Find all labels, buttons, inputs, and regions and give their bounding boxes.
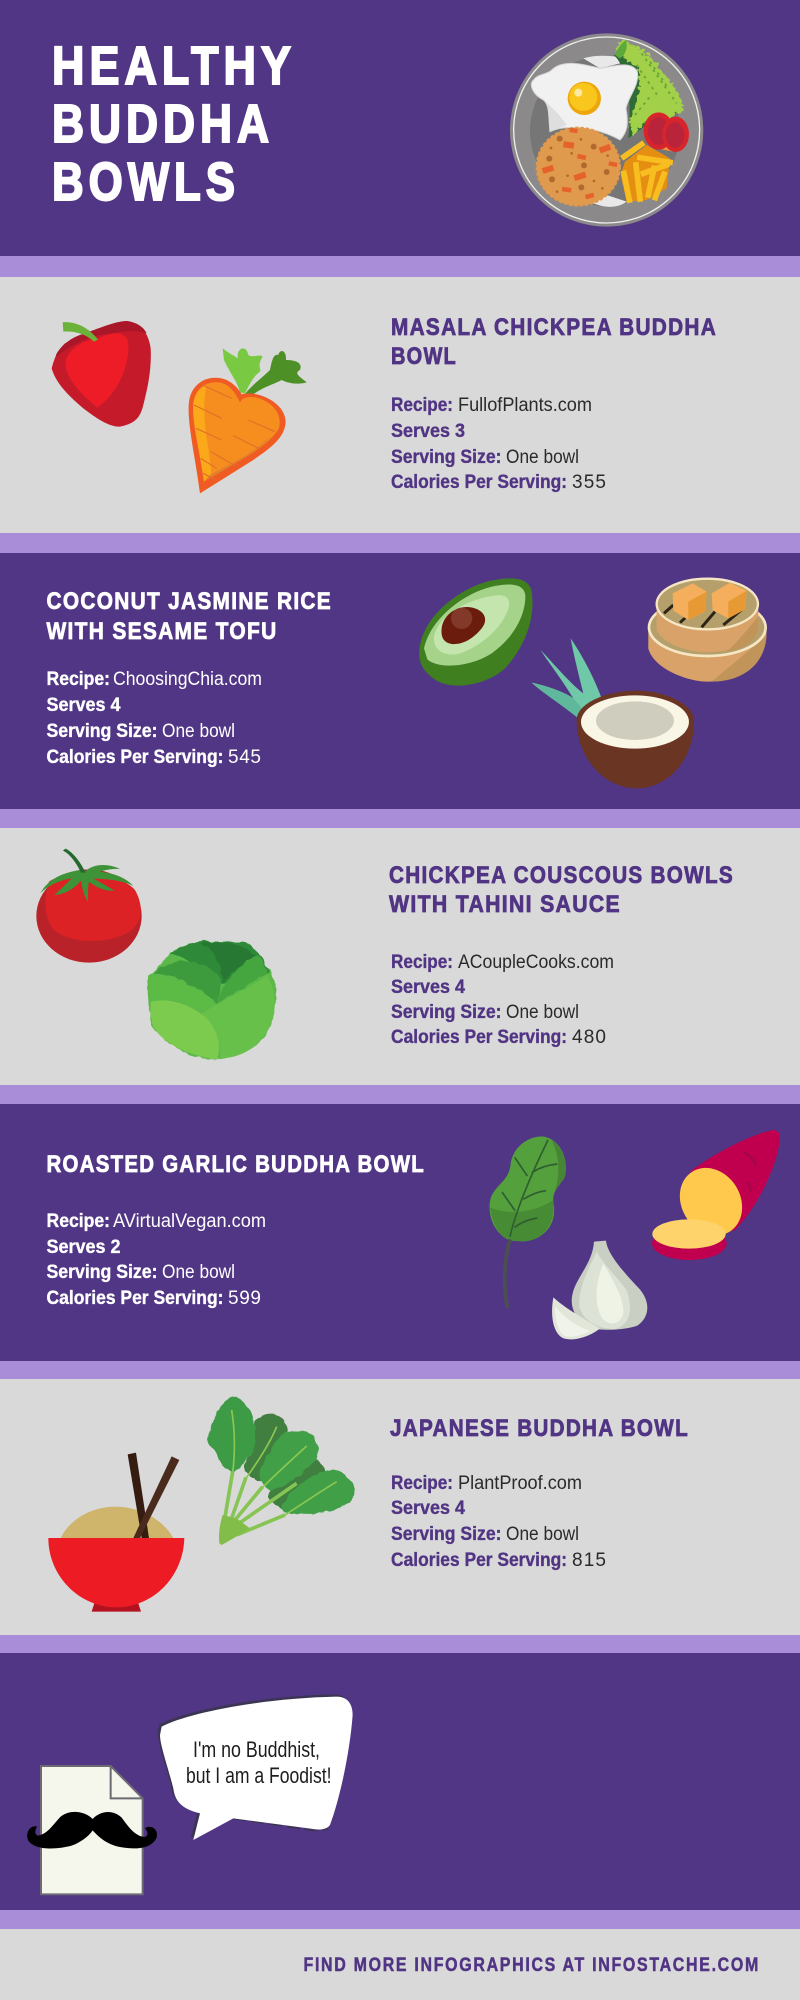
callout: speech bubble [158, 1694, 353, 1840]
icon: sweet potato [652, 1130, 780, 1260]
icon: red bell pepper [52, 321, 151, 427]
recipe details: One bowl [162, 1262, 235, 1283]
recipe details: One bowl [162, 721, 235, 742]
panel: japanese buddha bowl [0, 1379, 800, 1635]
recipe details: Recipe: [391, 395, 453, 416]
recipe details: Recipe: [46, 1211, 110, 1232]
recipe details: One bowl [506, 1524, 579, 1545]
recipe details: Recipe: [46, 669, 110, 690]
heading [46, 588, 332, 645]
recipe details [391, 395, 606, 493]
icon: coconut [532, 638, 694, 788]
recipe details [46, 1211, 266, 1309]
heading: CHICKPEA COUSCOUS BOWLS [389, 862, 734, 889]
icon: spinach [207, 1396, 355, 1545]
icon: plate of egg, rice patty, fries, tomato and lettuce [510, 33, 703, 227]
recipe details: Serves 2 [46, 1237, 120, 1258]
title: BUDDHA [52, 95, 274, 154]
recipe details: Calories Per Serving: [46, 747, 224, 768]
recipe details: 545 [228, 747, 261, 768]
band [0, 1085, 800, 1104]
icon: bamboo steamer with tofu [648, 579, 767, 682]
heading: WITH SESAME TOFU [46, 618, 278, 645]
recipe details: Serving Size: [46, 1262, 158, 1283]
recipe details: ACoupleCooks.com [458, 952, 614, 973]
recipe details: 599 [228, 1288, 261, 1309]
panel: header [0, 0, 800, 256]
recipe details: Serves 4 [391, 1498, 465, 1519]
heading: BOWL [391, 343, 457, 370]
icon: garlic [552, 1241, 647, 1339]
heading [389, 862, 734, 918]
recipe details [391, 952, 614, 1048]
recipe details: Calories Per Serving: [46, 1288, 224, 1309]
recipe details: AVirtualVegan.com [113, 1211, 266, 1232]
callout: speech bubble: but I am a Foodist! [186, 1763, 332, 1788]
recipe details: 815 [572, 1550, 606, 1571]
recipe details [46, 669, 262, 768]
panel: coconut jasmine rice [0, 553, 800, 809]
title: HEALTHY [52, 37, 296, 96]
recipe details: Serves 4 [391, 977, 465, 998]
recipe details: FullofPlants.com [458, 395, 592, 416]
band [0, 1635, 800, 1653]
recipe details: Serving Size: [46, 721, 158, 742]
icon: tomato [36, 849, 142, 963]
icon: rice bowl with chopsticks [48, 1453, 184, 1612]
icon: avocado [419, 578, 532, 686]
recipe details: Serving Size: [391, 1524, 502, 1545]
recipe details: Recipe: [391, 952, 453, 973]
heading: ROASTED GARLIC BUDDHA BOWL [46, 1151, 425, 1178]
recipe details: One bowl [506, 447, 579, 468]
title [52, 37, 296, 212]
recipe details: Calories Per Serving: [391, 1550, 567, 1571]
recipe details: ChoosingChia.com [113, 669, 262, 690]
recipe details: Calories Per Serving: [391, 472, 567, 493]
heading [391, 314, 717, 370]
icon: paper mascot with moustache [27, 1766, 157, 1894]
band [0, 1361, 800, 1379]
recipe details: Serves 3 [391, 421, 465, 442]
heading: COCONUT JASMINE RICE [46, 588, 332, 615]
title: BOWLS [52, 153, 240, 212]
recipe details: Serves 4 [46, 695, 121, 716]
callout: speech bubble: I'm no Buddhist, [193, 1737, 320, 1762]
recipe details: One bowl [506, 1002, 579, 1023]
recipe details: PlantProof.com [458, 1473, 582, 1494]
heading: WITH TAHINI SAUCE [389, 891, 621, 918]
band [0, 809, 800, 828]
icon: cabbage [148, 941, 276, 1059]
recipe details: 355 [572, 472, 606, 493]
heading: MASALA CHICKPEA BUDDHA [391, 314, 717, 341]
band [0, 1910, 800, 1929]
recipe details: Serving Size: [391, 447, 502, 468]
band [0, 533, 800, 553]
heading: JAPANESE BUDDHA BOWL [390, 1415, 689, 1442]
recipe details: Recipe: [391, 1473, 453, 1494]
icon: carrot [189, 348, 307, 493]
recipe details: Serving Size: [391, 1002, 502, 1023]
recipe details: Calories Per Serving: [391, 1027, 567, 1048]
icon: leaf [490, 1136, 566, 1308]
panel: mascot quote [0, 1653, 800, 1910]
panel: chickpea couscous bowls [0, 828, 800, 1085]
panel: masala chickpea buddha bowl [0, 277, 800, 533]
panel: roasted garlic buddha bowl [0, 1104, 800, 1361]
recipe details: 480 [572, 1027, 606, 1048]
band [0, 256, 800, 277]
panel: footer [0, 1929, 800, 2000]
recipe details [391, 1473, 606, 1571]
